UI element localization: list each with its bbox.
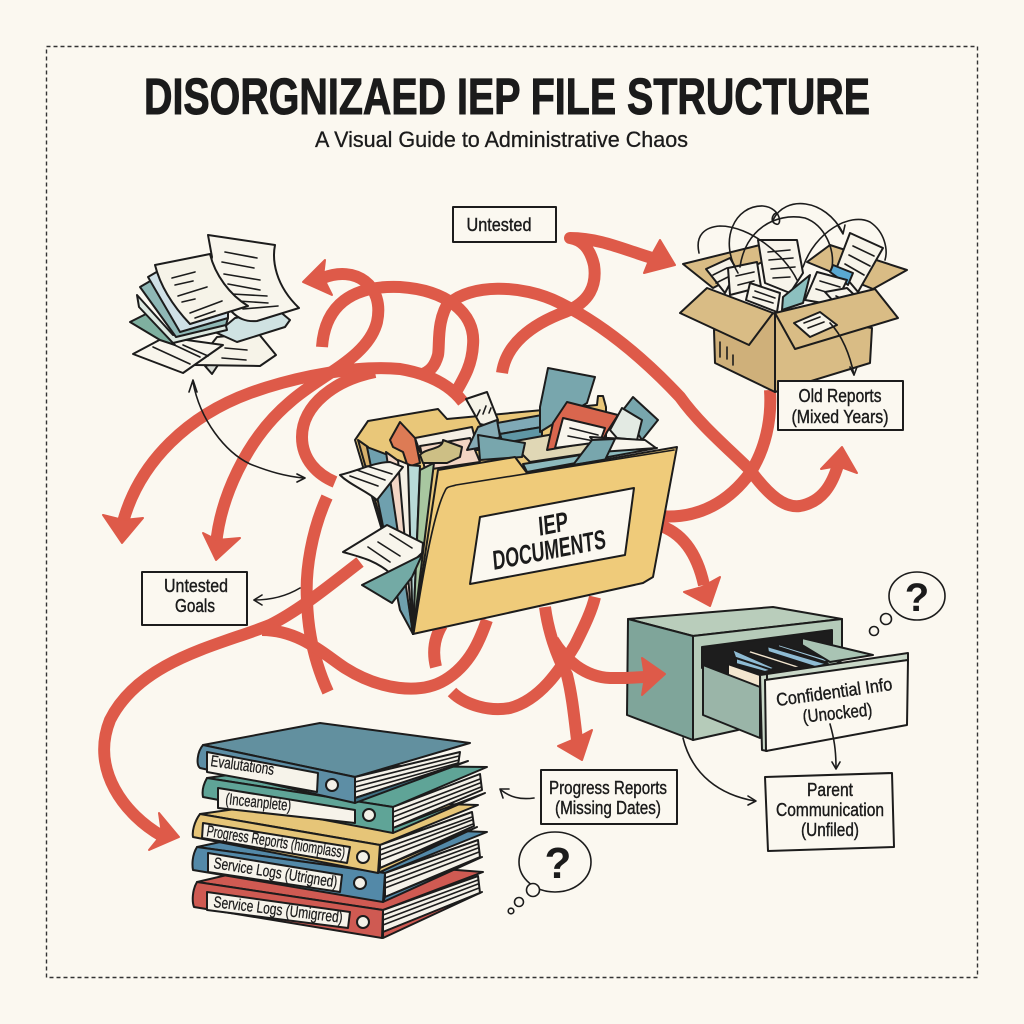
label: Progress Reports (Missing Dates): Progress Reports <box>549 778 667 798</box>
thin arrow: to Untested Goals <box>254 588 300 605</box>
label: Untested Goals: Goals <box>175 596 215 616</box>
icon: overstuffed IEP folder <box>340 368 677 634</box>
icon: thought bubble top right <box>870 572 945 636</box>
chaotic red arrows <box>103 238 857 850</box>
label: Old Reports (Mixed Years) <box>778 381 903 430</box>
icon: thought bubble bottom <box>508 832 591 914</box>
folder label: IEP Documents <box>470 488 634 584</box>
icon: scattered paper pile <box>130 235 299 374</box>
icon: binder stack <box>192 723 487 938</box>
thin arrow: pile to folder <box>189 380 305 482</box>
drawer label: Confidential Info (Unlocked): Confidential Info <box>775 674 893 710</box>
thin arrow: to binder stack <box>500 789 534 799</box>
folder label: IEP Documents: IEP <box>537 505 569 542</box>
label: Old Reports (Mixed Years): (Mixed Years) <box>792 407 888 427</box>
label: Old Reports (Mixed Years): Old Reports <box>798 386 882 406</box>
label: Parent Communication (Unfiled) <box>765 773 894 851</box>
label: Untested <box>453 207 556 242</box>
drawer label: Confidential Info (Unlocked): (Unocked) <box>802 699 873 727</box>
label: Parent Communication (Unfiled): (Unfiled) <box>801 820 859 840</box>
binder: teal: (Inceanplete) <box>225 791 292 815</box>
label: Untested: Untested <box>466 215 532 235</box>
binder: blue top: Evalutations <box>209 753 275 779</box>
binder: yellow <box>193 800 478 873</box>
label: Parent Communication (Unfiled): Communication <box>776 800 884 820</box>
binder: dark blue: Service Logs (Utrigned) <box>212 855 338 892</box>
icon: overflowing cardboard box <box>680 204 907 392</box>
icon: thought bubble bottom: ? <box>545 839 571 888</box>
label: Progress Reports (Missing Dates): (Missing Dates) <box>555 798 661 818</box>
binder: red: Service Logs (Umigrred) <box>213 894 344 927</box>
icon: thought bubble top right: ? <box>905 576 929 620</box>
label: Untested Goals <box>142 572 247 625</box>
binder: blue top <box>198 723 470 803</box>
folder label: IEP Documents: DOCUMENTS <box>491 523 607 576</box>
thin arrow: drawer to Parent Communication <box>830 724 840 769</box>
arrow into cabinet <box>625 658 665 695</box>
icon: filing cabinet with open drawer <box>627 607 908 751</box>
label: Parent Communication (Unfiled): Parent <box>807 780 853 800</box>
binder: dark blue <box>192 825 487 902</box>
binder: yellow: Progress Reports (hiomplass) <box>205 823 346 862</box>
label: Untested Goals: Untested <box>164 576 228 596</box>
subtitle: A Visual Guide to Administrative Chaos <box>315 127 688 152</box>
thin arrow: cabinet to Parent Communication <box>683 738 756 805</box>
drawer label: Confidential Info (Unlocked) <box>775 674 893 727</box>
label: Progress Reports (Missing Dates) <box>541 770 677 824</box>
binder: red <box>193 858 483 938</box>
binder: teal <box>203 765 487 833</box>
